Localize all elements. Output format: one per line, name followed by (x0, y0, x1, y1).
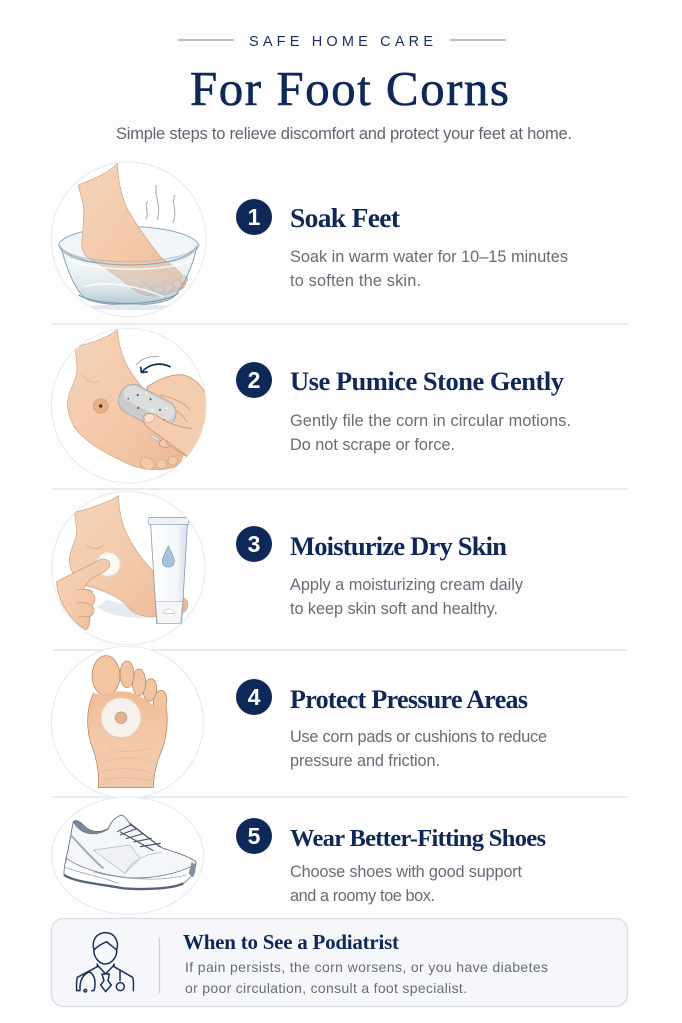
description: to soften the skin. (290, 272, 421, 290)
icon: foot soaking in glass bowl (51, 162, 206, 317)
heading: Soak Feet (290, 202, 401, 233)
step number 2: 2 (248, 367, 260, 393)
description: Do not scrape or force. (290, 436, 455, 454)
icon: sole of foot with corn pad (51, 646, 203, 798)
shoe upper (64, 815, 196, 889)
step number 1: 1 (248, 204, 261, 230)
heading: Wear Better-Fitting Shoes (290, 825, 546, 852)
description: and a roomy toe box. (290, 887, 435, 905)
arrow (141, 364, 171, 373)
step number 3 (236, 526, 272, 562)
icon: steam (146, 185, 175, 223)
midsole (64, 858, 195, 889)
panel: step 1 soak feet (51, 162, 568, 317)
icon: foot with pumice stone and hand (51, 328, 210, 483)
callout: when to see a podiatrist (52, 918, 628, 1006)
step number 3: 3 (248, 531, 260, 557)
panels (93, 845, 140, 873)
heading: Moisturize Dry Skin (290, 531, 507, 561)
step number 1 (236, 199, 272, 235)
panel: step 5 better-fitting shoes (52, 797, 546, 914)
description: Use corn pads or cushions to reduce (290, 728, 547, 746)
hand behind stone (147, 375, 208, 457)
icon: white sneaker (52, 797, 204, 914)
panel: step 4 protect pressure areas (51, 646, 547, 798)
heading: Use Pumice Stone Gently (290, 366, 564, 396)
callout text: or poor circulation, consult a foot specialist. (185, 980, 467, 996)
laces (117, 823, 161, 851)
icon: heel with cream tube (52, 491, 205, 645)
icon: doctor (76, 933, 133, 992)
callout heading: When to See a Podiatrist (183, 930, 399, 954)
step number 5 (236, 818, 272, 854)
callout text: If pain persists, the corn worsens, or you have diabetes (185, 959, 548, 975)
cream tube (149, 518, 189, 623)
heading: Protect Pressure Areas (290, 685, 528, 714)
description: Gently file the corn in circular motions. (290, 412, 571, 430)
description: to keep skin soft and healthy. (290, 600, 498, 618)
header (116, 34, 572, 143)
description: Apply a moisturizing cream daily (290, 576, 524, 594)
small finger under stone (159, 439, 171, 448)
title: For Foot Corns (190, 61, 509, 116)
toes (140, 284, 152, 296)
step number 2 (236, 362, 272, 398)
corn (93, 399, 108, 413)
pointing hand (57, 559, 110, 630)
eyebrow label: SAFE HOME CARE (249, 34, 433, 50)
description: Soak in warm water for 10–15 minutes (290, 248, 568, 266)
thumb (143, 414, 203, 456)
corn pad (101, 698, 141, 738)
subtitle: Simple steps to relieve discomfort and protect your feet at home. (116, 125, 572, 143)
panel: step 3 moisturize (52, 491, 524, 645)
pumice stone (118, 384, 176, 423)
step number 5: 5 (248, 823, 261, 849)
cream dab (97, 553, 120, 576)
description: Choose shoes with good support (290, 863, 522, 881)
collar lining (73, 821, 108, 834)
step number 4 (236, 679, 272, 715)
step number 4: 4 (248, 684, 261, 710)
outsole (64, 875, 183, 889)
description: pressure and friction. (290, 752, 440, 770)
panel: step 2 pumice stone (51, 328, 571, 483)
